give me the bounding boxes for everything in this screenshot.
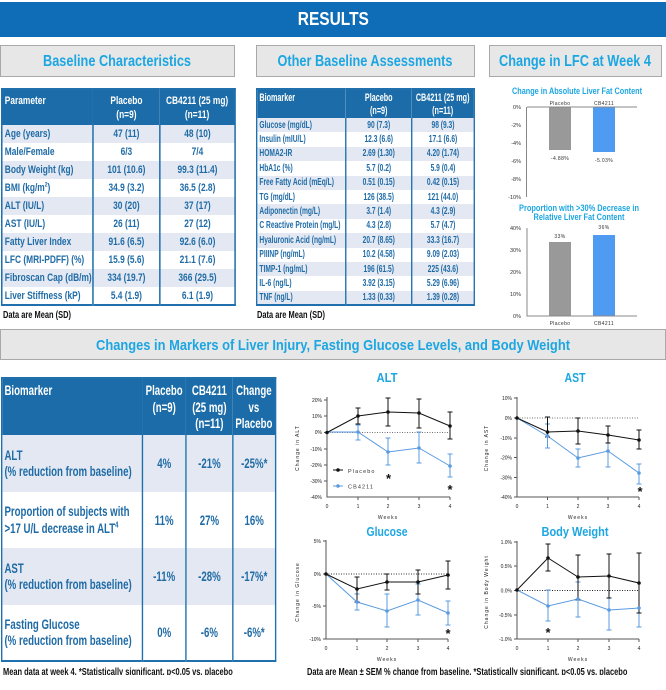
chart: change in absolute liver fat content: -5.03%	[595, 158, 613, 164]
table: baseline characteristics: Body Weight (kg)	[5, 164, 73, 176]
note: other baseline table: Data are Mean (SD)	[257, 309, 325, 321]
table: baseline characteristics: ALT (IU/L)	[5, 200, 44, 212]
table: changes in biomarkers: Fasting Glucose	[4, 616, 80, 632]
chart: change in absolute liver fat content: -2%	[511, 123, 521, 129]
chart: ALT: 3	[418, 504, 421, 510]
table: baseline characteristics: Age (years)	[5, 128, 50, 140]
chart: body weight: 0	[516, 646, 519, 652]
chart: ALT: 20%	[312, 398, 323, 404]
chart: glucose: -10%	[309, 637, 322, 643]
table: baseline characteristics: 101 (10.6)	[107, 164, 145, 176]
table: baseline characteristics: 6/3	[121, 146, 132, 158]
table: changes in biomarkers: (25 mg)	[192, 398, 227, 414]
table: changes in biomarkers: Placebo	[235, 415, 272, 431]
table: other baseline assessments: 90 (7.3)	[367, 120, 390, 131]
chart: glucose: Weeks	[377, 657, 397, 663]
chart: proportion with over 30 percent decrease: 33%	[554, 234, 566, 240]
table: changes in biomarkers: ALT	[4, 447, 23, 463]
table: changes in biomarkers: 27%	[200, 512, 219, 528]
table: baseline characteristics: 91.6 (6.5)	[109, 236, 144, 248]
chart: glucose: 0	[325, 646, 328, 652]
chart: AST: Change in AST	[484, 425, 490, 471]
chart: AST: 3	[607, 504, 610, 510]
chart: AST: Weeks	[568, 515, 588, 521]
table: other baseline assessments: 12.3 (6.6)	[364, 134, 393, 145]
chart: glucose: 5%	[314, 539, 322, 545]
chart: proportion with over 30 percent decrease: 10%	[510, 292, 521, 298]
table: baseline characteristics: 48 (10)	[184, 128, 211, 140]
table: other baseline assessments: Glucose (mg/dL)	[259, 120, 312, 131]
chart: ALT: Weeks	[378, 515, 398, 521]
chart: proportion with over 30 percent decrease: CB4211	[594, 321, 614, 327]
table: changes in biomarkers: (n=9)	[153, 398, 176, 414]
chart: ALT: -10%	[310, 447, 323, 453]
table: baseline characteristics: Parameter	[5, 95, 46, 107]
chart: ALT: 0%	[315, 430, 323, 436]
chart: AST: 10%	[502, 396, 513, 402]
chart: body weight: 2	[577, 646, 580, 652]
table: changes in biomarkers: Biomarker	[4, 382, 52, 398]
chart: AST: 1	[546, 504, 549, 510]
table: other baseline assessments: 126 (38.5)	[364, 192, 394, 203]
table: other baseline assessments: HOMA2-IR	[259, 148, 292, 159]
chart: body weight: 4	[638, 646, 641, 652]
table: other baseline assessments: 0.51 (0.15)	[363, 177, 395, 188]
chart: AST: AST	[564, 370, 586, 385]
table: baseline characteristics: Male/Female	[5, 146, 55, 158]
chart: proportion with over 30 percent decrease: Relative Liver Fat Content	[534, 212, 625, 223]
chart: proportion with over 30 percent decrease: 36%	[598, 225, 610, 231]
chart: change in absolute liver fat content: -6%	[511, 159, 521, 165]
table: other baseline assessments: 1.39 (0.28)	[427, 292, 459, 303]
chart: body weight: 1	[547, 646, 550, 652]
chart: proportion with over 30 percent decrease: Placebo	[550, 321, 570, 327]
table: changes in biomarkers: 0%	[157, 624, 171, 640]
table: changes in biomarkers: -25%*	[241, 455, 267, 471]
chart: AST: -20%	[500, 456, 513, 462]
chart: glucose: 1	[356, 646, 359, 652]
table: baseline characteristics: CB4211 (25 mg)	[166, 95, 228, 107]
chart: ALT: Change in ALT	[295, 425, 301, 471]
table: baseline characteristics: 47 (11)	[113, 128, 139, 140]
table: changes in biomarkers: Proportion of subjects with	[4, 503, 130, 519]
heading text labels: Other Baseline Assessments	[278, 53, 452, 70]
table: changes in biomarkers: CB4211	[192, 382, 227, 398]
table: other baseline assessments: 20.7 (8.65)	[363, 235, 395, 246]
table: changes in biomarkers: (% reduction from baseline)	[4, 463, 132, 479]
chart: glucose: *	[445, 626, 451, 641]
table: changes in biomarkers: >17 U/L decrease in ALT4	[4, 519, 118, 536]
table: other baseline assessments: 121 (44.0)	[428, 192, 458, 203]
table: other baseline assessments: (n=11)	[432, 104, 453, 116]
chart: change in absolute liver fat content: 0%	[513, 105, 521, 111]
table: other baseline assessments: 5.29 (6.96)	[427, 278, 459, 289]
heading text labels: Baseline Characteristics	[43, 53, 191, 70]
chart: ALT: CB4211	[348, 484, 374, 490]
table: changes in biomarkers: (% reduction from baseline)	[4, 576, 132, 592]
chart: change in absolute liver fat content: -4%	[511, 141, 521, 147]
table: other baseline assessments: C Reactive Protein (mg/L)	[259, 220, 340, 231]
table: other baseline assessments: Insulin (mIU/L)	[259, 134, 306, 145]
table: other baseline assessments: TNF (ng/L)	[259, 292, 293, 303]
table: baseline characteristics: (n=11)	[185, 109, 209, 121]
table: other baseline assessments: 4.3 (2.8)	[366, 220, 391, 231]
chart: ALT: -30%	[310, 479, 323, 485]
chart: ALT: *	[447, 482, 453, 497]
chart: glucose: 3	[417, 646, 420, 652]
table: changes in biomarkers: vs	[249, 398, 259, 414]
chart: glucose: -5%	[312, 604, 322, 610]
table: baseline characteristics: 99.3 (11.4)	[177, 164, 217, 176]
chart: proportion with over 30 percent decrease: 20%	[510, 270, 521, 276]
panel heading: baseline characteristics	[0, 45, 235, 77]
table: changes in biomarkers: -17%*	[241, 568, 267, 584]
table: changes in biomarkers: -28%	[198, 568, 221, 584]
chart: AST: -30%	[500, 476, 513, 482]
note: baseline table: Data are Mean (SD)	[3, 309, 71, 321]
table: baseline characteristics: 92.6 (6.0)	[180, 236, 215, 248]
chart: ALT: 10%	[312, 414, 323, 420]
table: other baseline assessments: HbA1c (%)	[259, 163, 293, 174]
chart: AST: *	[637, 484, 643, 499]
table: baseline characteristics: 7/4	[192, 146, 203, 158]
chart: glucose: Glucose	[366, 524, 408, 539]
table: other baseline assessments: 2.69 (1.30)	[363, 148, 395, 159]
panel heading: other baseline assessments	[256, 45, 475, 77]
table: other baseline assessments: 5.7 (4.7)	[431, 220, 455, 231]
table: other baseline assessments: TIMP-1 (ng/mL)	[259, 264, 308, 275]
table: other baseline assessments: IL-6 (ng/L)	[259, 278, 292, 289]
table: other baseline assessments: Hyaluronic Acid (ng/mL)	[259, 235, 336, 246]
chart: change in absolute liver fat content: Placebo	[550, 101, 570, 107]
table: other baseline assessments: 3.7 (1.4)	[366, 206, 391, 217]
table: other baseline assessments: 17.1 (6.6)	[429, 134, 457, 145]
table: changes in biomarkers: (n=11)	[195, 415, 223, 431]
table: changes in biomarkers: AST	[4, 560, 24, 576]
chart: AST: 0	[516, 504, 519, 510]
table: baseline characteristics: 34.9 (3.2)	[109, 182, 144, 194]
table: baseline characteristics: 30 (20)	[113, 200, 140, 212]
chart: ALT: 4	[449, 504, 452, 510]
table: other baseline assessments: PIIINP (ng/mL)	[259, 249, 305, 260]
table: other baseline assessments: 4.20 (1.74)	[427, 148, 459, 159]
table: changes in biomarkers: 4%	[157, 455, 171, 471]
heading text labels: Changes in Markers of Liver Injury, Fasting Glucose Levels, and Body Weight	[96, 337, 570, 354]
chart: ALT: ALT	[376, 370, 398, 385]
table: changes in biomarkers: -11%	[153, 568, 175, 584]
table: changes in biomarkers: -21%	[198, 455, 221, 471]
section heading bar	[0, 329, 666, 360]
chart: AST: 4	[638, 504, 641, 510]
results banner	[0, 2, 666, 37]
table: other baseline assessments: 225 (43.6)	[428, 264, 458, 275]
table: other baseline assessments	[256, 88, 475, 306]
table: changes in biomarkers: Placebo	[146, 382, 183, 398]
chart: body weight: *	[545, 625, 551, 640]
chart: glucose: 2	[386, 646, 389, 652]
table: baseline characteristics: Fibroscan Cap (dB/m)	[5, 272, 92, 284]
table: baseline characteristics	[1, 88, 236, 306]
chart: ALT: 2	[387, 504, 390, 510]
chart: proportion with over 30 percent decrease: 40%	[510, 226, 521, 232]
table: other baseline assessments: (n=9)	[370, 104, 387, 116]
table: other baseline assessments: 33.3 (16.7)	[427, 235, 459, 246]
table: other baseline assessments: 1.33 (0.33)	[363, 292, 395, 303]
chart: AST: -10%	[500, 436, 513, 442]
table: baseline characteristics: Liver Stiffness (kP)	[5, 290, 81, 302]
table: baseline characteristics: 37 (17)	[184, 200, 211, 212]
table: changes in biomarkers: 11%	[155, 512, 174, 528]
table: other baseline assessments: 98 (9.3)	[432, 120, 454, 131]
table: baseline characteristics: 5.4 (1.9)	[111, 290, 142, 302]
results banner: RESULTS	[297, 9, 369, 29]
table: other baseline assessments: 3.92 (3.15)	[363, 278, 395, 289]
chart: change in absolute liver fat content: CB4211	[594, 101, 614, 107]
table: changes in biomarkers: Change	[236, 382, 272, 398]
table: other baseline assessments: 10.2 (4.58)	[363, 249, 395, 260]
chart: body weight: Body Weight	[542, 524, 609, 539]
chart: body weight: -1.0%	[499, 637, 513, 643]
chart: change in absolute liver fat content: -8%	[511, 177, 521, 183]
table: other baseline assessments: 9.09 (2.03)	[427, 249, 459, 260]
table: other baseline assessments: Free Fatty Acid (mEq/L)	[259, 177, 334, 188]
table: baseline characteristics: 6.1 (1.9)	[182, 290, 213, 302]
table: other baseline assessments: 5.9 (0.4)	[431, 163, 455, 174]
chart: change in absolute liver fat content: -4.88%	[551, 156, 569, 162]
table: baseline characteristics: 26 (11)	[113, 218, 139, 230]
table: baseline characteristics: LFC (MRI-PDFF) (%)	[5, 254, 84, 266]
chart: ALT: 0	[326, 504, 329, 510]
table: baseline characteristics: 15.9 (5.6)	[109, 254, 144, 266]
chart: ALT: 1	[357, 504, 360, 510]
chart: glucose: 4	[447, 646, 450, 652]
table: changes in biomarkers: -6%	[201, 624, 218, 640]
table: other baseline assessments: Adiponectin (mg/L)	[259, 206, 320, 217]
table: changes in biomarkers: -6%*	[244, 624, 265, 640]
table: other baseline assessments: Placebo	[365, 92, 393, 104]
chart: body weight: 0.5%	[501, 564, 513, 570]
table: baseline characteristics: 366 (29.5)	[178, 272, 217, 284]
table: baseline characteristics: 21.1 (7.6)	[180, 254, 215, 266]
table: baseline characteristics: 36.5 (2.8)	[180, 182, 215, 194]
table: other baseline assessments: CB4211 (25 mg)	[416, 92, 469, 104]
panel heading: change in LFC	[489, 45, 662, 77]
chart: glucose: 0%	[314, 572, 322, 578]
chart: AST: 0%	[505, 416, 513, 422]
table: other baseline assessments: 4.3 (2.9)	[431, 206, 455, 217]
table: baseline characteristics: (n=9)	[116, 109, 137, 121]
table: baseline characteristics: 27 (12)	[184, 218, 211, 230]
chart: body weight: -0.5%	[499, 613, 513, 619]
table: baseline characteristics: AST (IU/L)	[5, 218, 45, 230]
chart: ALT: -40%	[310, 495, 323, 501]
chart: proportion with over 30 percent decrease: 30%	[510, 248, 521, 254]
table: other baseline assessments: TG (mg/dL)	[259, 192, 295, 203]
chart: body weight: 1.0%	[501, 540, 513, 546]
chart: ALT: Placebo	[348, 469, 376, 475]
table: changes in biomarkers	[1, 377, 276, 662]
chart: body weight: 0.0%	[501, 588, 513, 594]
chart: proportion with over 30 percent decrease: 0%	[513, 314, 521, 320]
table: baseline characteristics: 334 (19.7)	[107, 272, 145, 284]
table: other baseline assessments: 0.42 (0.15)	[427, 177, 459, 188]
chart: ALT: -20%	[310, 463, 323, 469]
table: changes in biomarkers: (% reduction from baseline)	[4, 632, 132, 648]
table: other baseline assessments: 5.7 (0.2)	[366, 163, 391, 174]
table: changes in biomarkers: 16%	[245, 512, 264, 528]
chart: ALT: *	[386, 471, 392, 486]
chart: glucose: Change in Glucose	[295, 562, 301, 622]
chart: AST: 2	[577, 504, 580, 510]
table: other baseline assessments: Biomarker	[259, 92, 295, 104]
table: other baseline assessments: 196 (61.5)	[364, 264, 394, 275]
table: baseline characteristics: Fatty Liver Index	[5, 236, 71, 248]
chart: AST: -40%	[500, 495, 513, 501]
chart: body weight: 3	[608, 646, 611, 652]
table: baseline characteristics: Placebo	[110, 95, 142, 107]
chart: body weight: Weeks	[568, 657, 588, 663]
table: baseline characteristics: BMI (kg/m2)	[5, 181, 50, 194]
chart: body weight: Change in Body Weight	[484, 555, 490, 629]
chart: change in absolute liver fat content: -10%	[508, 195, 521, 201]
